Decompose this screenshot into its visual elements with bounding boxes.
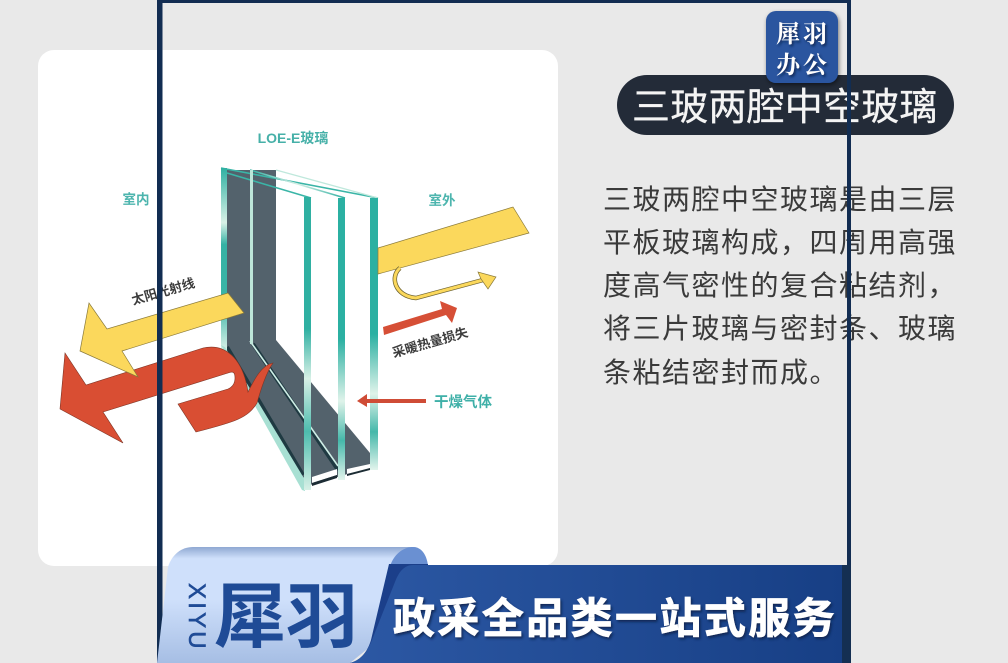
badge: company stamp	[766, 11, 838, 83]
arrow: sunlight reflected	[395, 268, 496, 298]
text block: description: 平板玻璃构成，四周用高强	[603, 227, 957, 258]
arrow: sunlight outside	[378, 207, 529, 274]
navy frame	[157, 0, 851, 663]
heading pill	[617, 75, 954, 135]
label: indoors: 室内	[122, 191, 150, 207]
badge: company stamp: 办公	[776, 52, 830, 79]
text block: description: 将三片玻璃与密封条、玻璃	[603, 313, 957, 344]
text block: description: 三玻两腔中空玻璃是由三层	[603, 184, 957, 215]
label: heating heat loss: 采暖热量损失	[391, 325, 470, 360]
label: solar rays: 太阳光射线	[130, 275, 196, 308]
label: outdoors: 室外	[428, 192, 456, 208]
heading pill: 三玻两腔中空玻璃	[632, 87, 938, 129]
icon: triple glazed glass unit	[221, 168, 378, 491]
panel: window diagram card	[38, 50, 558, 566]
slogan: 政采全品类一站式服务	[393, 595, 837, 642]
logo text: 犀羽	[214, 558, 358, 663]
label: dry gas: 干燥气体	[434, 393, 492, 411]
logo text XIYU: XIYU	[183, 583, 210, 652]
arrow: heat loss	[383, 301, 457, 335]
arrow: yellow sunlight indoors	[80, 293, 244, 377]
text block: description: 条粘结密封而成。	[603, 357, 839, 388]
text block: description: 度高气密性的复合粘结剂，	[603, 270, 957, 301]
arrow: red heat arrow indoors	[60, 347, 273, 443]
banner: slogan footer	[157, 547, 851, 663]
badge: company stamp: 犀羽	[776, 21, 830, 48]
text block: description	[603, 184, 957, 388]
arrow: dry gas pointer	[357, 394, 426, 407]
label: LOE-E glass: LOE-E玻璃	[258, 130, 328, 146]
logo ribbon	[157, 547, 428, 663]
